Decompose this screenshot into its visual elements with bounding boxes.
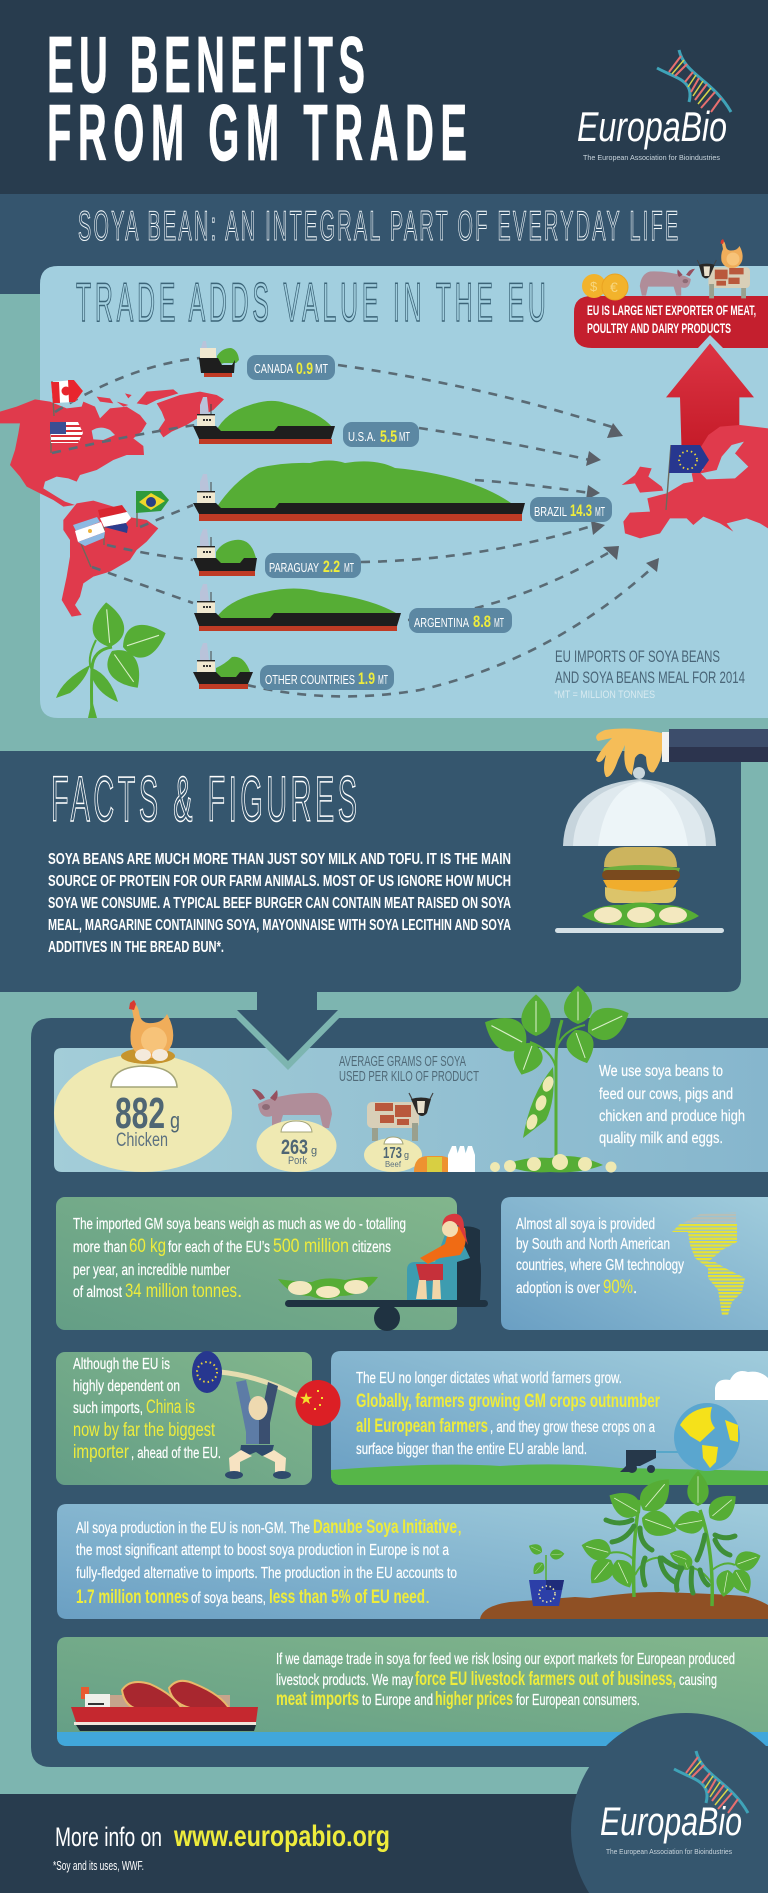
label: Canada: MT [315, 361, 328, 376]
ship: Brazil [193, 460, 525, 521]
title: FROM GM TRADE [47, 89, 467, 178]
text: supply: 90% [603, 1277, 633, 1298]
subtitle band [0, 194, 768, 294]
note: grams [339, 1053, 479, 1085]
chart: chicken bubble: 882 [115, 1089, 165, 1138]
icon: weightlifter [192, 1351, 340, 1479]
panel: EU soya production [57, 1471, 768, 1619]
text: China: , ahead of the EU. [131, 1445, 221, 1462]
text: soya feed: We use soya beans to [599, 1063, 723, 1080]
icon: seedling in EU pot [527, 1541, 565, 1606]
text: supply: adoption is over [516, 1280, 600, 1297]
facts text: MEAL, MARGARINE CONTAINING SOYA, MAYONNAISE WITH SOYA LECITHIN AND SOYA [48, 917, 511, 934]
text: weight: citizens [352, 1239, 391, 1256]
icon: pig [252, 1089, 332, 1128]
ship: Argentina [194, 584, 401, 631]
text: supply: Almost all soya is provided [516, 1216, 655, 1233]
chart: pork bubble: 263 [281, 1136, 308, 1159]
route arrowheads [586, 423, 659, 572]
panel: imported GM soya weight [56, 1197, 488, 1331]
icon: woman on scale [278, 1214, 488, 1331]
note: grams: USED PER KILO OF PRODUCT [339, 1068, 479, 1085]
text: weight [73, 1216, 406, 1302]
text: weight: of almost [73, 1284, 123, 1301]
footer logo circle [571, 1713, 768, 1893]
text: weight: per year, an incredible number [73, 1262, 230, 1279]
flag: EU [666, 445, 709, 510]
panel: facts and figures [0, 751, 741, 992]
panel: dark content area [31, 1018, 768, 1767]
label: other countries [260, 665, 394, 690]
icon: harvester [620, 1450, 656, 1473]
label: Canada [247, 355, 335, 380]
text: damage: livestock products. We may [276, 1672, 413, 1689]
panel: grams of soya [54, 986, 768, 1172]
title [47, 21, 467, 178]
text: supply: . [633, 1280, 637, 1297]
text: weight: The imported GM soya beans weigh as much as we do - totalling [73, 1216, 406, 1233]
label: Paraguay: PARAGUAY [269, 560, 319, 575]
text: weight: 60 kg [129, 1236, 166, 1257]
logo: EuropaBio header: EuropaBio [577, 103, 727, 150]
facts text: ADDITIVES IN THE BREAD BUN*. [48, 939, 224, 956]
icon: pig [640, 269, 695, 296]
facts text: SOURCE OF PROTEIN FOR OUR FARM ANIMALS. MOST OF US IGNORE HOW MUCH [48, 873, 511, 890]
label: USA: 5.5 [380, 427, 397, 446]
facts text: SOYA BEANS ARE MUCH MORE THAN JUST SOY MILK AND TOFU. IT IS THE MAIN [48, 851, 511, 868]
chart: beef bubble: g [404, 1150, 409, 1160]
callout: EU net exporter [574, 296, 768, 348]
icon: hand and sleeve [596, 729, 768, 777]
chart: chicken bubble [54, 1054, 232, 1172]
flag: USA [50, 422, 83, 453]
panel: trade map [0, 239, 768, 718]
icon: cheese [414, 1156, 456, 1172]
note: grams: AVERAGE GRAMS OF SOYA [339, 1053, 466, 1070]
footer link [55, 1820, 390, 1853]
text: weight: for each of the EU’s [168, 1239, 270, 1256]
red export arrow [666, 343, 754, 453]
icon: cow [367, 1093, 433, 1141]
text: world farmers: The EU no longer dictates what world farmers grow. [356, 1370, 622, 1387]
map: the Americas [0, 389, 224, 617]
text: damage [276, 1651, 735, 1710]
flag: Argentina [73, 517, 105, 567]
ship: Canada [199, 341, 239, 377]
text: EU production: of soya beans, [191, 1590, 266, 1607]
panel: American supply [501, 1197, 768, 1330]
subtitle: SOYA BEAN: AN INTEGRAL PART OF EVERYDAY LIFE [78, 202, 678, 249]
icon: coins: $ [590, 279, 598, 294]
text: soya feed [599, 1063, 745, 1147]
text: soya feed: feed our cows, pigs and [599, 1086, 733, 1103]
label: Paraguay: MT [344, 560, 354, 575]
route lines [52, 358, 652, 696]
text: world farmers [356, 1370, 660, 1458]
label: Argentina: 8.8 [473, 612, 491, 631]
label: Argentina [409, 608, 512, 633]
text: supply: by South and North American [516, 1236, 670, 1253]
panel: world farmers [331, 1351, 768, 1485]
logo: EuropaBio header [577, 50, 731, 162]
label: USA: MT [399, 429, 410, 444]
footnote: *Soy and its uses, WWF. [53, 1858, 144, 1873]
facts text [48, 851, 511, 956]
text: damage: causing [679, 1672, 717, 1689]
label: USA: U.S.A. [348, 429, 376, 444]
text: damage: higher prices [435, 1689, 513, 1710]
label: Canada: CANADA [254, 361, 293, 376]
water [57, 1732, 768, 1746]
footer band [0, 1794, 768, 1893]
flag: Paraguay [98, 505, 131, 545]
label: Argentina: MT [494, 615, 504, 630]
footer link: www.europabio.org [173, 1820, 390, 1853]
chart: beef bubble: 173 [383, 1145, 402, 1162]
text: supply: countries, where GM technology [516, 1257, 684, 1274]
flag: Brazil [136, 491, 169, 527]
label: Brazil: BRAZIL [534, 504, 567, 519]
label: Brazil: 14.3 [570, 501, 592, 520]
label: Argentina: ARGENTINA [414, 615, 469, 630]
icon: cloud [715, 1371, 768, 1400]
chart: beef bubble [364, 1137, 422, 1172]
icon: large soy plant [477, 986, 635, 1172]
icon: coins [582, 274, 628, 300]
panel: China biggest importer [56, 1351, 340, 1485]
text: weight: 500 million [273, 1236, 349, 1257]
label: other countries: OTHER COUNTRIES [265, 672, 355, 687]
chart: pork bubble: g [311, 1145, 317, 1157]
note: EU imports [554, 647, 745, 701]
ground [331, 1464, 768, 1485]
label: other countries: 1.9 [358, 669, 375, 688]
text: China [73, 1356, 221, 1463]
text: EU production: fully-fledged alternative to imports. The production in the EU accounts to [76, 1565, 457, 1582]
note: EU imports: *MT = MILLION TONNES [554, 689, 655, 701]
logo: EuropaBio header: The European Association for Bioindustries [583, 153, 720, 162]
icon: soy plant in map [56, 601, 171, 718]
ship: USA [193, 397, 335, 444]
text: soya feed: quality milk and eggs. [599, 1130, 723, 1147]
text: supply [516, 1216, 684, 1298]
heading: trade adds value: TRADE ADDS VALUE IN THE EU [76, 272, 546, 334]
icon: globe [650, 1403, 740, 1471]
text: China: China is [146, 1397, 195, 1418]
label: Brazil: MT [595, 504, 605, 519]
icon: striped Americas map [672, 1212, 745, 1315]
logo: EuropaBio footer [600, 1751, 748, 1856]
ship: Paraguay [193, 529, 257, 576]
text: weight: more than [73, 1239, 127, 1256]
text: EU production: the most significant attempt to boost soya production in Europe is not a [76, 1542, 449, 1559]
text: world farmers: surface bigger than the entire EU arable land. [356, 1441, 587, 1458]
text: EU production [76, 1517, 462, 1608]
text: weight: 34 million tonnes [125, 1281, 237, 1302]
chart: pork bubble [256, 1120, 336, 1172]
label: Brazil [530, 497, 612, 522]
soil [480, 1592, 768, 1619]
label: Paraguay [265, 553, 361, 578]
text: EU production: , [457, 1517, 462, 1538]
label: other countries: MT [378, 672, 388, 687]
text: world farmers: , and they grow these crops on a [490, 1419, 655, 1436]
text: EU production: less than 5% of EU need [269, 1587, 425, 1608]
icon: chicken [720, 239, 743, 268]
arrow: down from facts [228, 985, 347, 1070]
icon: milk bottles [448, 1146, 475, 1172]
chart: chicken bubble: Chicken [116, 1130, 168, 1151]
text: damage: to Europe and [362, 1692, 433, 1709]
text: China: Although the EU is [73, 1356, 170, 1373]
chart: pork bubble: Pork [288, 1155, 307, 1167]
icon: chicken on bubble [121, 1000, 175, 1064]
ship: other countries [193, 643, 253, 689]
icon: coins: € [610, 279, 618, 295]
icon: cow [697, 260, 750, 298]
text: weight: . [237, 1281, 242, 1302]
flag: Canada [51, 380, 83, 416]
footer link: More info on [55, 1822, 162, 1852]
text: damage: meat imports [276, 1689, 359, 1710]
header band [0, 0, 768, 194]
label: Paraguay: 2.2 [323, 557, 340, 576]
text: world farmers: all European farmers [356, 1416, 488, 1437]
map: Europe [622, 343, 768, 538]
text: damage: for European consumers. [516, 1692, 640, 1709]
text: EU production: Danube Soya Initiative [313, 1517, 457, 1538]
text: China: highly dependent on [73, 1378, 180, 1395]
label: Canada: 0.9 [296, 359, 313, 378]
text: EU production: 1.7 million tonnes [76, 1587, 189, 1608]
icon: large soy plants [579, 1471, 764, 1606]
title: EU BENEFITS [47, 21, 365, 110]
facts text: SOYA WE CONSUME. A TYPICAL BEEF BURGER CAN CONTAIN MEAT RAISED ON SOYA [48, 895, 511, 912]
text: EU production: All soya production in the EU is non-GM. The [76, 1520, 310, 1537]
text: China: importer [73, 1442, 130, 1463]
logo: EuropaBio footer: The European Association for Bioindustries [606, 1847, 732, 1856]
icon: weightlifter: ★ [299, 1391, 313, 1408]
text: EU production: . [425, 1587, 430, 1608]
text: China: such imports, [73, 1400, 143, 1417]
label: USA [343, 422, 419, 447]
icon: meat ship [71, 1681, 258, 1731]
icon: dome and burger [555, 767, 724, 933]
panel: damage to trade [57, 1637, 768, 1746]
heading: facts and figures: FACTS & FIGURES [51, 763, 357, 835]
chart: chicken bubble: g [170, 1108, 180, 1133]
text: China: now by far the biggest [73, 1420, 216, 1441]
chart: beef bubble: Beef [385, 1160, 402, 1169]
